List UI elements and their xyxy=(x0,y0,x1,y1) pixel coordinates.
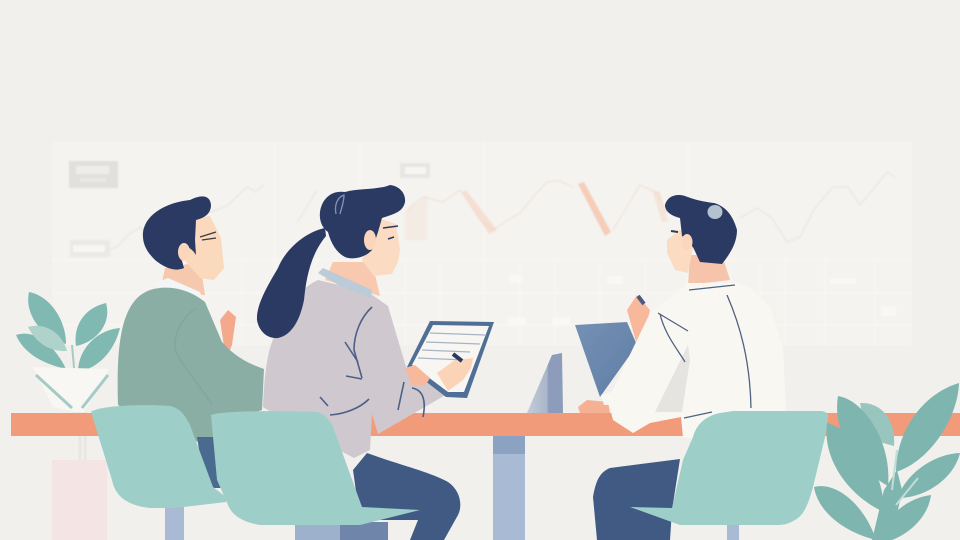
ear xyxy=(178,243,190,261)
trousers xyxy=(197,437,224,488)
raised hand xyxy=(220,310,236,360)
ear xyxy=(682,234,692,250)
gap behind arm xyxy=(655,345,690,412)
face xyxy=(362,218,400,276)
resting hand xyxy=(578,400,610,413)
hair xyxy=(665,195,737,264)
clipboard xyxy=(407,321,494,398)
raised hand xyxy=(627,295,650,345)
pot xyxy=(52,460,107,540)
person: left man in green sweater xyxy=(118,196,264,488)
collar xyxy=(153,278,210,318)
cuff xyxy=(601,392,614,405)
sleeve seam xyxy=(175,308,212,405)
pale back leaf xyxy=(860,403,894,446)
hair xyxy=(320,185,405,258)
right plant xyxy=(814,383,960,540)
ponytail xyxy=(257,228,326,338)
jumper body and arm xyxy=(263,280,449,458)
collar xyxy=(318,268,372,298)
face xyxy=(186,216,224,280)
neck xyxy=(160,262,205,295)
chart line: middle segment xyxy=(407,181,667,230)
base stalk xyxy=(872,470,902,540)
neck xyxy=(688,255,730,285)
leaves xyxy=(814,383,960,540)
chair: left xyxy=(91,405,226,540)
white shirt xyxy=(608,283,786,440)
person: man in white shirt xyxy=(578,195,786,540)
hair clip xyxy=(708,205,722,219)
face xyxy=(667,230,693,273)
hair highlight xyxy=(335,195,344,214)
hair xyxy=(143,196,211,270)
leaves xyxy=(16,292,120,372)
hands and pen xyxy=(405,365,430,386)
stem highlights xyxy=(892,450,918,505)
desk prism xyxy=(527,353,563,413)
chart line: right segment xyxy=(740,172,895,242)
shirt creases xyxy=(658,285,751,418)
chair: right xyxy=(630,411,828,540)
stems xyxy=(80,412,85,460)
panel: wall dashboard xyxy=(52,141,912,346)
chart highlight: falling peach bands xyxy=(405,182,668,240)
pen xyxy=(638,296,644,304)
trousers xyxy=(353,453,460,540)
trousers xyxy=(593,459,680,540)
neck xyxy=(325,262,380,296)
chart line: left segment xyxy=(108,185,317,250)
jumper creases xyxy=(320,307,424,417)
white planter xyxy=(33,367,109,412)
eye xyxy=(383,226,398,239)
eye xyxy=(671,231,678,232)
laptop xyxy=(575,322,637,397)
ear xyxy=(364,230,376,250)
green sweater xyxy=(118,288,264,442)
chair: middle xyxy=(211,411,420,540)
table leg xyxy=(493,436,525,540)
table top xyxy=(11,413,960,436)
person: woman with ponytail xyxy=(257,185,494,540)
eye xyxy=(200,232,216,240)
left plant xyxy=(16,292,120,540)
dashboard label chips xyxy=(69,161,896,326)
